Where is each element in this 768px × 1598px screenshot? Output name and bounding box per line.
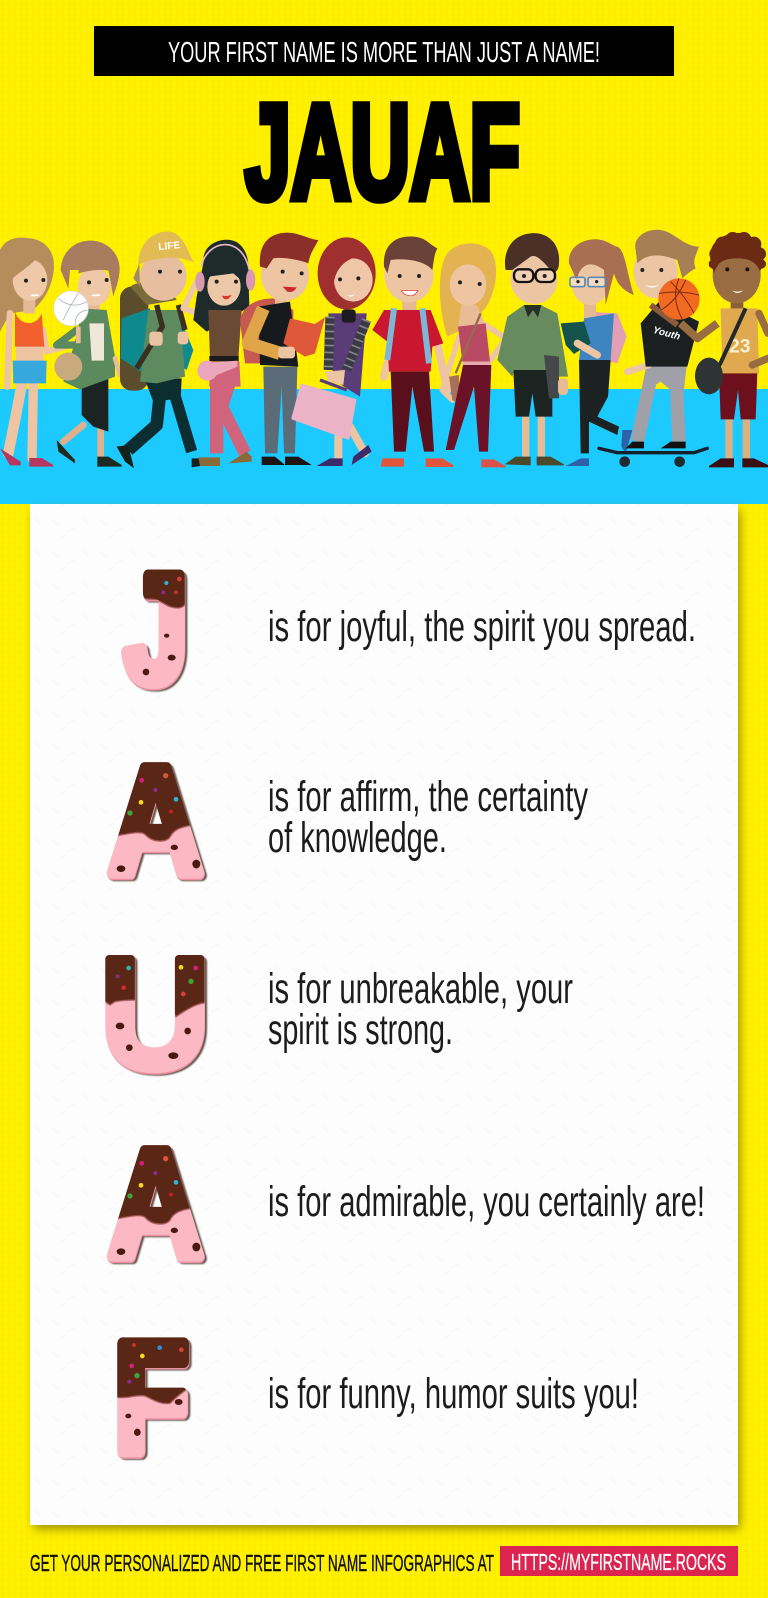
- icon: chocolate letter F: F: [114, 1311, 188, 1484]
- row 4: second letter A: [108, 1119, 705, 1289]
- row 2: letter A: [108, 736, 588, 906]
- panel: content card: [30, 504, 738, 1525]
- blue floor band: [0, 389, 768, 504]
- person 3: hiker with backpack and cap: LIFE: [158, 240, 181, 253]
- row 1: letter J: [124, 544, 696, 714]
- text: first A lines: of knowledge.: [268, 814, 447, 862]
- content card shadow: [34, 510, 740, 1529]
- person 3: hiker with backpack and cap: [117, 231, 207, 468]
- icon: chocolate letter A: A: [108, 1119, 203, 1289]
- person 4: girl with headphones: [183, 240, 255, 466]
- illustration: group of twelve students: [0, 230, 768, 468]
- text: first A lines: is for affirm, the certainty: [268, 773, 588, 821]
- person 5: boy with book and backpack: [240, 233, 325, 465]
- icon: chocolate letter A: A: [108, 736, 203, 906]
- person 11: boy on skateboard with basketball: Youth: [652, 325, 681, 343]
- person 6: girl with red bob and pink bag: [293, 237, 376, 466]
- person 7: boy in red shirt: [372, 236, 453, 467]
- person 11: boy on skateboard with basketball: [599, 230, 707, 467]
- person 1: girl in orange top: [0, 238, 77, 467]
- person 12: boy in yellow tank with satchel: 23: [729, 337, 751, 358]
- row 3: letter U: [100, 926, 573, 1102]
- text: U lines: spirit is strong.: [268, 1006, 453, 1054]
- person 8: blonde girl: [440, 243, 506, 467]
- person 9: boy with glasses and green sweater: [497, 233, 568, 465]
- person 2: girl in green jacket with volleyball: [54, 241, 122, 467]
- row 5: letter F: [114, 1311, 639, 1484]
- icon: chocolate letter J: J: [124, 544, 188, 714]
- header banner: [94, 26, 674, 76]
- person 12: boy in yellow tank with satchel: [658, 232, 768, 467]
- text: U lines: [268, 965, 573, 1054]
- text: U lines: is for unbreakable, your: [268, 965, 573, 1013]
- title: JAUAF: [245, 78, 520, 227]
- footer: [30, 1546, 738, 1576]
- person 10: girl with tablet and ponytail: [561, 239, 634, 466]
- icon: chocolate letter U: U: [100, 926, 210, 1102]
- text: first A lines: [268, 773, 588, 862]
